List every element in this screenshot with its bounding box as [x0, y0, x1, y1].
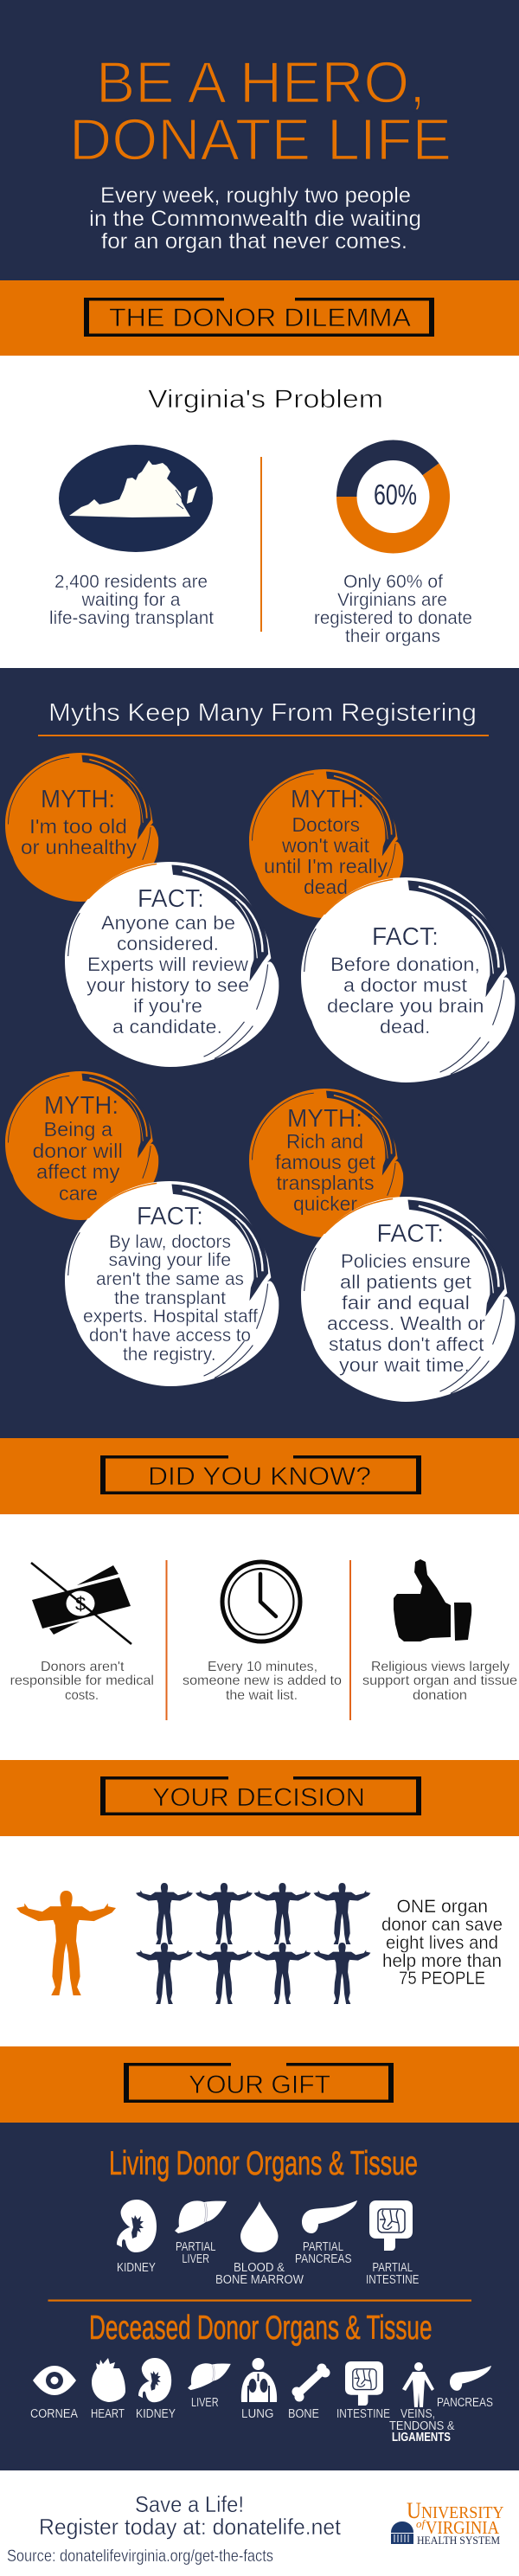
myth 3: donor will	[33, 1140, 123, 1162]
icon: kidney	[117, 2200, 157, 2252]
text: registered virginians	[314, 572, 472, 646]
fact 3	[65, 1181, 279, 1386]
myth 1: or unhealthy	[21, 836, 138, 858]
fact 2	[301, 877, 515, 1082]
myth 2: won't wait	[281, 834, 370, 857]
text: residents waiting	[49, 572, 214, 628]
title	[69, 50, 452, 173]
myth 2: MYTH:	[291, 786, 364, 813]
labels: living donor organs: BONE MARROW	[215, 2273, 304, 2287]
icon: lungs	[241, 2358, 277, 2402]
text: residents waiting: life-saving transplant	[49, 608, 214, 628]
myth 4: MYTH:	[287, 1105, 362, 1133]
logo: university of virginia health system: of	[416, 2517, 427, 2530]
text: religious views: Religious views largely	[371, 1660, 509, 1674]
call to action: Save a Life!	[135, 2491, 244, 2517]
icon: liver	[188, 2363, 231, 2390]
fact 1: your history to see	[86, 974, 249, 996]
fact 4	[301, 1197, 515, 1402]
labels: deceased donor organs: LUNG	[241, 2407, 273, 2421]
text: wait list: Every 10 minutes,	[208, 1660, 317, 1674]
text: religious views: donation	[413, 1688, 467, 1703]
heading band: your decision	[0, 1760, 519, 1836]
labels: deceased donor organs: INTESTINE	[336, 2407, 390, 2421]
source: Source: donatelifevirginia.org/get-the-facts	[7, 2547, 273, 2566]
call to action	[39, 2491, 342, 2540]
fact 2: a doctor must	[343, 974, 467, 996]
heading band: your decision: YOUR DECISION	[152, 1783, 365, 1812]
myth 1	[5, 753, 158, 902]
icon: crossed out money: $	[75, 1593, 86, 1615]
fact 4: your wait time.	[339, 1354, 470, 1376]
intro text	[89, 183, 421, 254]
text: wait list: someone new is added to	[183, 1673, 342, 1688]
myth 2: until I'm really	[264, 855, 388, 877]
icon: intestine	[345, 2361, 383, 2406]
fact 3: By law, doctors	[109, 1232, 231, 1252]
logo: university of virginia health system: VIRGINIA	[426, 2517, 500, 2538]
fact 4: access. Wealth or	[327, 1313, 485, 1334]
icon: bone	[292, 2364, 330, 2402]
icon: pancreas	[450, 2366, 491, 2391]
icon: eight recipient figures	[136, 1883, 370, 2004]
panel: your gift organs	[0, 2123, 519, 2470]
text: religious views: support organ and tissue	[362, 1673, 517, 1688]
fact 1: if you're	[133, 995, 202, 1017]
icon: intestine	[369, 2200, 413, 2251]
heading band: your gift	[0, 2046, 519, 2123]
chart: 60 percent donut	[336, 440, 450, 553]
fact 3: the transplant	[114, 1288, 226, 1308]
heading band: did you know	[0, 1438, 519, 1514]
icon: crossed out money	[31, 1563, 131, 1644]
fact 1	[65, 862, 279, 1067]
myth 4: famous get	[275, 1151, 376, 1173]
logo: university of virginia health system: HEALTH SYSTEM	[417, 2534, 500, 2547]
logo: university of virginia health system	[391, 2498, 503, 2547]
fact 4: Policies ensure	[341, 1250, 471, 1272]
labels: deceased donor organs: BONE	[288, 2407, 319, 2421]
fact 3: FACT:	[137, 1203, 203, 1230]
myth 1: I'm too old	[29, 815, 127, 838]
text: medical costs: responsible for medical	[10, 1673, 154, 1688]
text: registered virginians: Virginians are	[337, 590, 447, 610]
labels: living donor organs: PANCREAS	[295, 2252, 351, 2266]
myth 2: dead	[304, 876, 348, 898]
myth 1: MYTH:	[41, 786, 115, 813]
labels: living donor organs: PARTIAL	[176, 2240, 216, 2254]
icon: body veins and tendons	[402, 2362, 434, 2407]
labels: living donor organs: BLOOD &	[234, 2261, 285, 2275]
text: one donor saves eight: eight lives and	[386, 1933, 498, 1953]
myth 4	[249, 1089, 403, 1237]
heading band: the donor dilemma: THE DONOR DILEMMA	[109, 304, 411, 332]
fact 4: FACT:	[377, 1220, 444, 1248]
labels: deceased donor organs: HEART	[91, 2407, 125, 2421]
myth 3: MYTH:	[44, 1092, 119, 1120]
fact 2: dead.	[380, 1016, 431, 1037]
text: medical costs	[10, 1660, 154, 1703]
text: registered virginians: Only 60% of	[343, 572, 443, 592]
myth 2	[249, 769, 403, 918]
text: one donor saves eight	[381, 1897, 503, 1988]
fact 2: Before donation,	[330, 954, 480, 975]
intro text: in the Commonwealth die waiting	[89, 207, 421, 231]
labels: deceased donor organs: LIVER	[191, 2396, 219, 2410]
labels: living donor organs: LIVER	[182, 2252, 209, 2266]
title: DONATE LIFE	[69, 107, 452, 173]
labels: living donor organs: KIDNEY	[117, 2261, 156, 2275]
divider	[260, 457, 262, 632]
icon: virginia map	[59, 445, 213, 552]
fact 3: aren't the same as	[96, 1269, 244, 1289]
heading band: your gift: YOUR GIFT	[189, 2071, 330, 2099]
text: one donor saves eight: help more than	[382, 1951, 502, 1971]
icon: eye	[33, 2366, 76, 2395]
panel: hero header	[0, 0, 519, 280]
labels: deceased donor organs: KIDNEY	[136, 2407, 176, 2421]
icon: thumbs up	[394, 1559, 471, 1641]
fact 3: the registry.	[123, 1345, 216, 1365]
labels: living donor organs	[117, 2240, 420, 2287]
labels: deceased donor organs: TENDONS &	[389, 2419, 455, 2433]
labels: deceased donor organs: CORNEA	[30, 2407, 78, 2421]
text: wait list: the wait list.	[226, 1688, 298, 1703]
text: registered virginians: their organs	[345, 626, 440, 646]
text: one donor saves eight: ONE organ	[396, 1897, 488, 1917]
labels: living donor organs: INTESTINE	[366, 2273, 420, 2287]
heading band: did you know: DID YOU KNOW?	[148, 1462, 371, 1491]
fact 1: FACT:	[138, 885, 204, 913]
panel: did you know facts	[0, 1514, 519, 1760]
panel: virginia's problem	[0, 356, 519, 668]
fact 1: Experts will review	[87, 954, 248, 975]
icon: pancreas	[302, 2200, 357, 2233]
myth 4: quicker	[293, 1192, 357, 1215]
icon: liver	[175, 2200, 227, 2233]
myth 3: care	[59, 1182, 98, 1204]
text: wait list	[183, 1660, 342, 1703]
chart: 60 percent donut: 60%	[374, 479, 417, 511]
title: BE A HERO,	[96, 50, 426, 116]
text: medical costs: Donors aren't	[41, 1660, 125, 1674]
call to action: Register today at: donatelife.net	[39, 2514, 342, 2540]
text: residents waiting: waiting for a	[80, 590, 181, 610]
fact 2: declare you brain	[327, 995, 484, 1017]
text: residents waiting: 2,400 residents are	[54, 572, 208, 592]
labels: living donor organs: PARTIAL	[303, 2240, 343, 2254]
icon: kidney	[138, 2358, 171, 2402]
intro text: for an organ that never comes.	[101, 229, 407, 254]
fact 4: all patients get	[340, 1271, 471, 1293]
myth 4: Rich and	[286, 1130, 363, 1153]
myth 3: Being a	[43, 1118, 112, 1140]
panel: footer	[0, 2470, 519, 2576]
text: one donor saves eight: 75 PEOPLE	[399, 1969, 485, 1988]
text: one donor saves eight: donor can save	[381, 1915, 503, 1935]
heading: Virginia's Problem	[148, 385, 383, 414]
heading: Myths Keep Many From Registering	[48, 699, 477, 727]
fact 1: Anyone can be	[101, 912, 235, 934]
myth 3: affect my	[36, 1160, 120, 1183]
panel: myths	[0, 668, 519, 1438]
icon: heart	[92, 2358, 125, 2402]
text: medical costs: costs.	[65, 1688, 99, 1703]
labels: deceased donor organs: PANCREAS	[437, 2396, 493, 2410]
text: registered virginians: registered to donate	[314, 608, 472, 628]
myth 2: Doctors	[292, 813, 360, 836]
panel: your decision	[0, 1836, 519, 2046]
heading band: the donor dilemma	[0, 280, 519, 356]
fact 4: status don't affect	[329, 1333, 484, 1355]
text: religious views	[362, 1660, 517, 1703]
labels: deceased donor organs	[30, 2396, 493, 2444]
myth 4: transplants	[277, 1172, 374, 1194]
fact 1: a candidate.	[112, 1016, 222, 1037]
labels: deceased donor organs: LIGAMENTS	[392, 2431, 451, 2444]
fact 3: saving your life	[109, 1250, 231, 1270]
icon: blood drop	[240, 2201, 279, 2252]
fact 4: fair and equal	[342, 1292, 470, 1314]
labels: deceased donor organs: VEINS,	[400, 2407, 435, 2421]
fact 2: FACT:	[372, 923, 439, 951]
myth 3	[5, 1071, 158, 1220]
logo: university of virginia health system: UNIVERSITY	[407, 2498, 503, 2523]
fact 1: considered.	[117, 933, 219, 954]
icon: orange donor figure	[16, 1891, 116, 1995]
dividers	[166, 1560, 351, 1720]
fact 3: experts. Hospital staff	[83, 1307, 258, 1327]
intro text: Every week, roughly two people	[100, 183, 411, 208]
fact 3: don't have access to	[89, 1326, 251, 1346]
icon: clock	[222, 1562, 300, 1641]
labels: living donor organs: PARTIAL	[372, 2261, 413, 2275]
